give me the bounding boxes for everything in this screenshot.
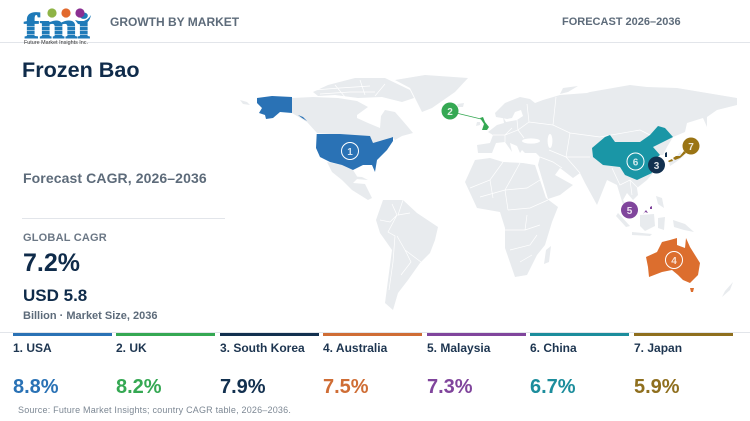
divider <box>22 218 225 219</box>
Malaysia <box>643 206 652 214</box>
legend: UK: 2. UK <box>116 341 147 355</box>
source note: Source: Future Market Insights; country CAGR table, 2026–2036. <box>18 405 291 415</box>
legend: Australia: 7.5% <box>323 376 369 398</box>
logo: Future Market Insights Inc. <box>24 40 88 46</box>
marker 5: 5 <box>627 206 633 217</box>
title: Frozen Bao <box>22 57 140 82</box>
marker 5 <box>621 202 638 218</box>
market size value: USD 5.8 <box>23 286 87 305</box>
footer rule <box>0 332 750 333</box>
Japan <box>668 151 686 162</box>
legend: Japan <box>634 333 733 398</box>
legend: China: 6.7% <box>530 376 576 398</box>
legend: China <box>530 333 629 398</box>
global CAGR label: GLOBAL CAGR <box>23 232 107 244</box>
global CAGR value: 7.2% <box>23 249 80 277</box>
legend: UK <box>116 333 215 398</box>
USA <box>257 96 393 172</box>
legend: USA: 8.8% <box>13 376 59 398</box>
legend: USA: 1. USA <box>13 341 52 355</box>
global CAGR block <box>23 232 158 322</box>
marker 4: 4 <box>671 256 677 267</box>
legend: South Korea: 7.9% <box>220 376 266 398</box>
marker 1 <box>342 142 358 160</box>
UK and leader line <box>452 112 489 130</box>
legend: Australia <box>323 333 422 398</box>
base land masses <box>240 75 737 310</box>
legend: South Korea <box>220 333 319 398</box>
subtitle: Forecast CAGR, 2026–2036 <box>23 170 207 186</box>
legend: South Korea: 3. South Korea <box>220 341 305 355</box>
marker 6 <box>627 153 644 170</box>
legend: Japan: 5.9% <box>634 376 680 398</box>
marker 6: 6 <box>633 158 639 168</box>
legend: Malaysia: 5. Malaysia <box>427 341 490 355</box>
legend: USA <box>13 333 112 398</box>
marker 3: 3 <box>654 161 660 172</box>
marker 4 <box>666 252 682 268</box>
Australia <box>646 238 700 292</box>
header label: growth by market: GROWTH BY MARKET <box>110 15 239 29</box>
legend: Malaysia <box>427 333 526 398</box>
logo: fmi <box>24 6 90 46</box>
legend: Malaysia: 7.3% <box>427 376 473 398</box>
legend: UK: 8.2% <box>116 376 162 398</box>
marker 2: 2 <box>447 107 453 118</box>
country borders <box>314 80 650 290</box>
China <box>592 126 673 180</box>
market size caption: Billion · Market Size, 2036 <box>23 310 158 322</box>
legend: China: 6. China <box>530 341 577 355</box>
header label: forecast period: FORECAST 2026–2036 <box>562 16 681 28</box>
marker 2 <box>442 102 458 120</box>
header rule <box>0 42 750 43</box>
marker 3 <box>648 156 665 174</box>
legend: Australia: 4. Australia <box>323 341 387 355</box>
legend: Japan: 7. Japan <box>634 341 682 355</box>
marker 7: 7 <box>688 142 694 153</box>
inland water <box>522 134 552 148</box>
marker 7 <box>682 138 700 154</box>
South Korea <box>665 152 667 157</box>
marker 1: 1 <box>347 147 353 158</box>
